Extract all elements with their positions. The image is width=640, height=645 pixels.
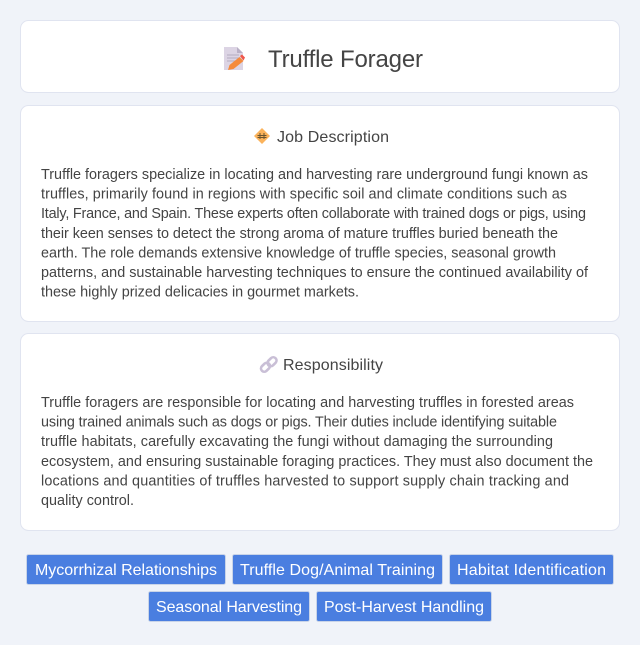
panel: title header bbox=[20, 20, 620, 92]
text block: responsibility: ecosystem, and ensuring sustainable foraging practices. They must also document the bbox=[41, 454, 593, 470]
text block: job description: earth. The role demands extensive knowledge of truffle species, seasonal growth bbox=[41, 245, 556, 261]
heading: responsibility: Responsibility bbox=[283, 357, 383, 374]
text block: job description: these highly prized delicacies in gourmet markets. bbox=[41, 285, 359, 301]
text block: responsibility bbox=[41, 395, 593, 509]
icon: diamond sign bbox=[254, 128, 270, 144]
text block: responsibility: truffle habitats, carefully excavating the fungi without damaging the surrounding bbox=[41, 434, 553, 450]
tag: mycorrhizal relationships bbox=[26, 554, 226, 584]
text block: responsibility: Truffle foragers are responsible for locating and harvesting truffles in forested areas bbox=[41, 395, 574, 411]
text block: responsibility: using trained animals such as dogs or pigs. Their duties include identifying suitable bbox=[41, 415, 557, 431]
text block: job description: Italy, France, and Spain. These experts often collaborate with trained dogs or pigs, using bbox=[41, 206, 586, 222]
tag: post-harvest handling: Post-Harvest Handling bbox=[324, 599, 484, 616]
tags bbox=[26, 554, 614, 622]
text block: job description: patterns, and sustainable harvesting techniques to ensure the continued availability of bbox=[41, 265, 589, 281]
panel: responsibility bbox=[20, 334, 620, 530]
panel: job description bbox=[20, 106, 620, 322]
tag: post-harvest handling bbox=[316, 592, 492, 622]
title: Truffle Forager bbox=[268, 46, 423, 73]
text block: job description: their keen senses to detect the strong aroma of mature truffles buried beneath the bbox=[41, 226, 558, 242]
icon: document with pencil bbox=[224, 47, 245, 70]
icon: chain link bbox=[260, 356, 278, 373]
tag: truffle dog/animal training: Truffle Dog/Animal Training bbox=[240, 562, 435, 579]
tag: seasonal harvesting: Seasonal Harvesting bbox=[156, 599, 302, 616]
text block: job description bbox=[41, 167, 589, 301]
tag: habitat identification bbox=[450, 554, 614, 584]
text block: responsibility: quality control. bbox=[41, 493, 134, 509]
text block: responsibility: locations and quantities of truffles harvested to support supply chain tracking and bbox=[41, 473, 569, 489]
tag: mycorrhizal relationships: Mycorrhizal Relationships bbox=[35, 562, 217, 579]
heading: job description: Job Description bbox=[277, 129, 389, 146]
text block: job description: Truffle foragers specialize in locating and harvesting rare underground fungi known as bbox=[41, 167, 588, 183]
tag: seasonal harvesting bbox=[148, 592, 310, 622]
tag: habitat identification: Habitat Identification bbox=[457, 562, 606, 579]
text block: job description: truffles, primarily found in regions with specific soil and climate conditions such as bbox=[41, 187, 567, 203]
tag: truffle dog/animal training bbox=[232, 554, 442, 584]
